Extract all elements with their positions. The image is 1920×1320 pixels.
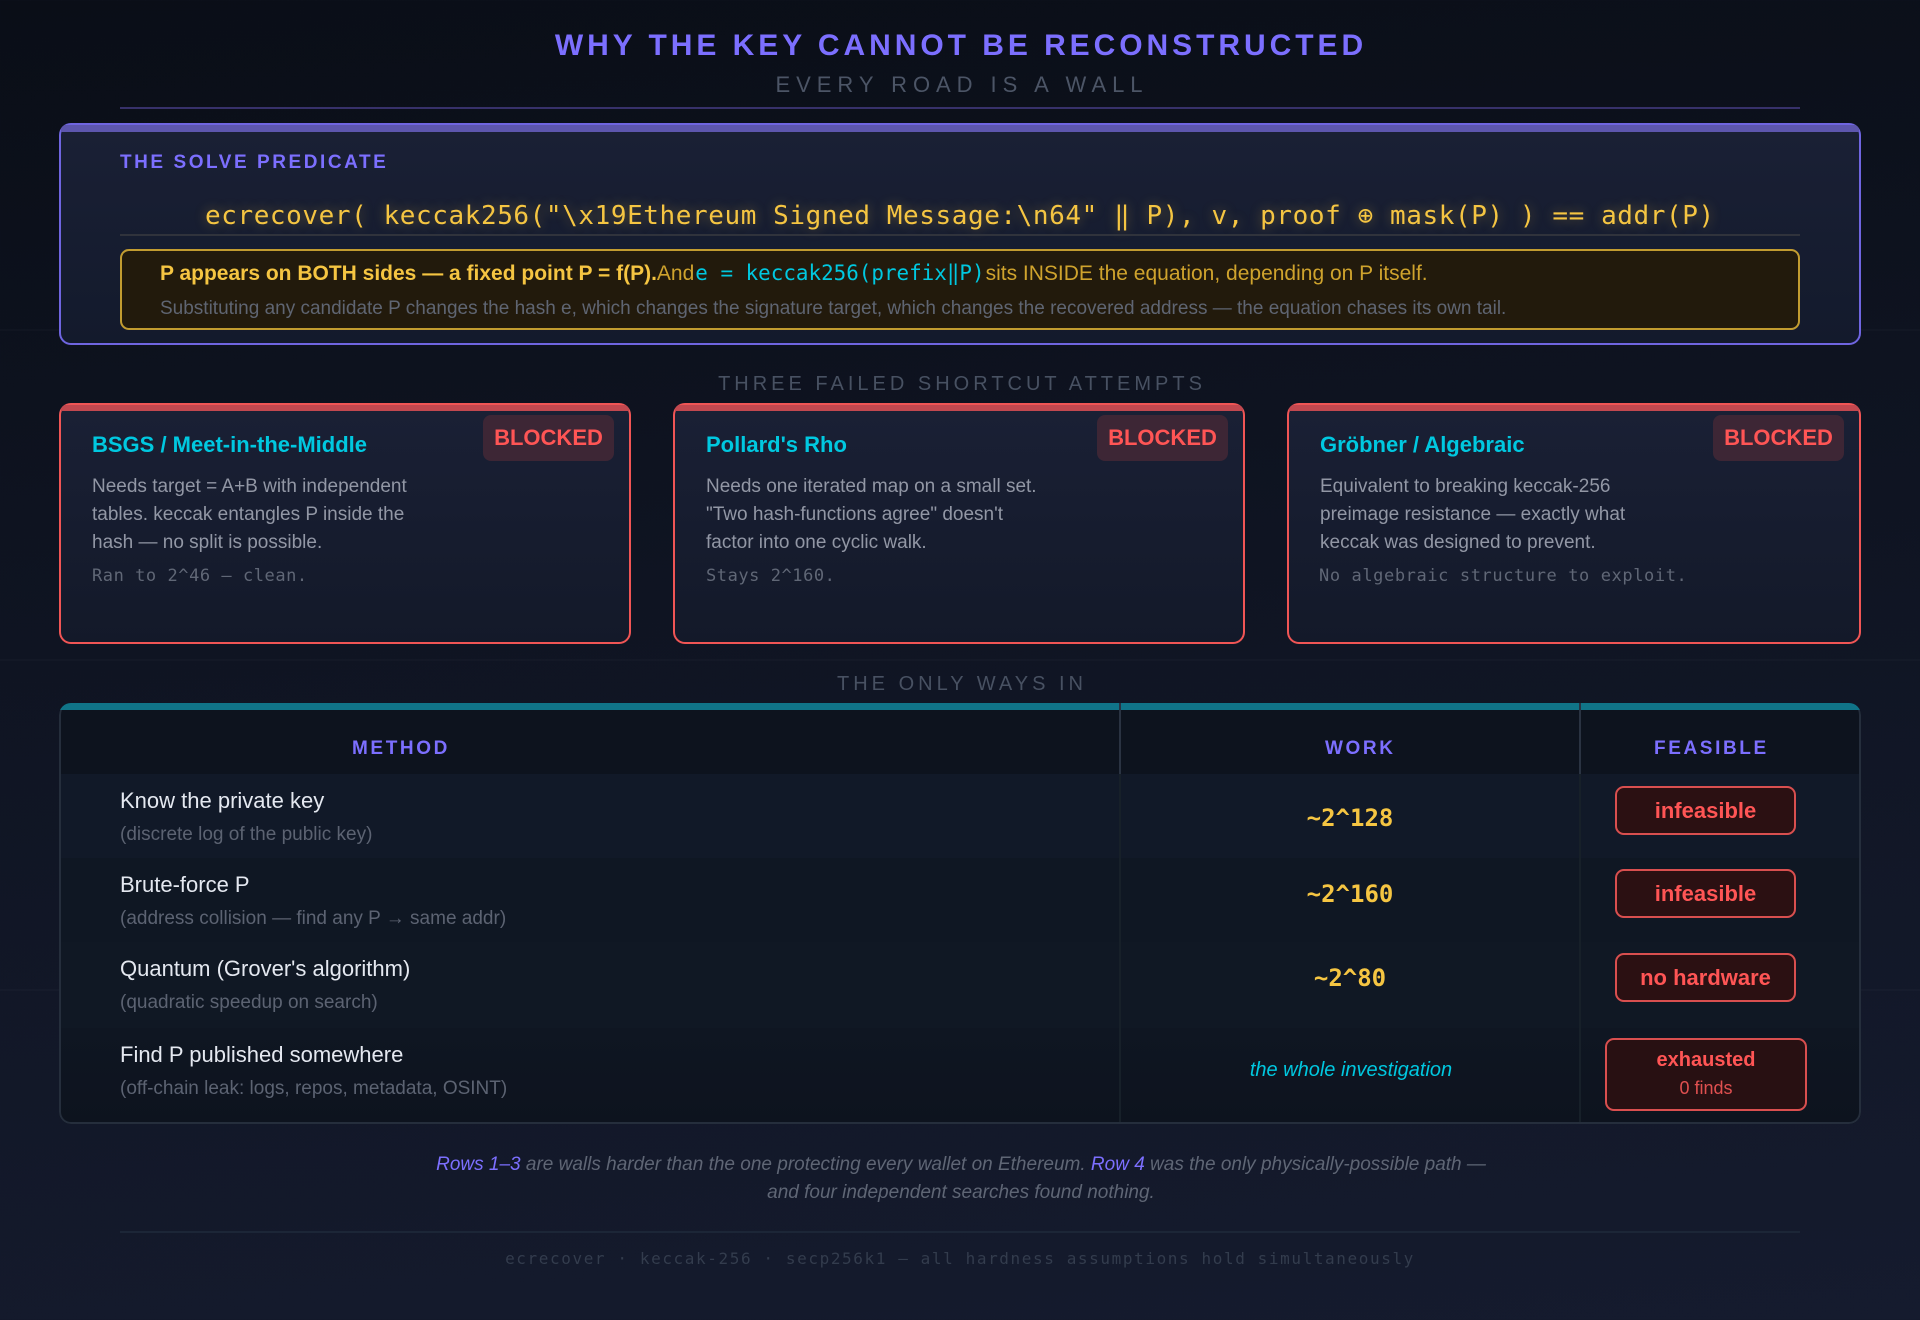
- card: Groebner: [1287, 403, 1861, 644]
- badge: blocked: BLOCKED: [1108, 425, 1217, 450]
- card title: Pollard's Rho: [706, 432, 847, 457]
- row 4 method: Find P published somewhere: [120, 1042, 403, 1067]
- section heading: failed attempts: THREE FAILED SHORTCUT ATTEMPTS: [718, 373, 1206, 395]
- row 2 method: Brute-force P: [120, 872, 250, 897]
- card body: [1320, 476, 1625, 553]
- caption: and four independent searches found nothing.: [767, 1182, 1155, 1203]
- card title: BSGS / Meet-in-the-Middle: [92, 432, 367, 457]
- footer: ecrecover · keccak-256 · secp256k1 — all hardness assumptions hold simultaneously: [505, 1249, 1415, 1268]
- card body: hash — no split is possible.: [92, 532, 322, 553]
- card title: Gröbner / Algebraic: [1320, 432, 1525, 457]
- card: BSGS: [59, 403, 631, 644]
- callout: fixed point: [120, 249, 1800, 330]
- card body: factor into one cyclic walk.: [706, 532, 927, 553]
- card body: "Two hash-functions agree" doesn't: [706, 504, 1003, 525]
- card body: Needs one iterated map on a small set.: [706, 476, 1037, 497]
- card body: preimage resistance — exactly what: [1320, 504, 1625, 525]
- status main: exhausted: [1657, 1048, 1755, 1070]
- card note: Ran to 2^46 — clean.: [92, 566, 308, 586]
- section heading: only ways in: THE ONLY WAYS IN: [837, 673, 1087, 695]
- card note: No algebraic structure to exploit.: [1319, 566, 1687, 586]
- badge: blocked: BLOCKED: [494, 425, 603, 450]
- row 4 status: [1605, 1038, 1807, 1111]
- panel: the solve predicate: [59, 123, 1861, 345]
- row 1 status: [1615, 786, 1796, 834]
- row 4 work: the whole investigation: [1250, 1059, 1452, 1081]
- row 2 work: ~2^160: [1307, 880, 1393, 908]
- column header: feasible: FEASIBLE: [1654, 738, 1769, 759]
- badge: blocked: [1097, 415, 1228, 461]
- card body: keccak was designed to prevent.: [1320, 532, 1596, 553]
- card body: Equivalent to breaking keccak-256: [1320, 476, 1610, 497]
- card body: [92, 476, 407, 553]
- column header: method: METHOD: [352, 738, 450, 759]
- card body: Needs target = A+B with independent: [92, 476, 407, 497]
- card: Pollard's Rho: [673, 403, 1245, 644]
- row 1 work: ~2^128: [1307, 804, 1393, 832]
- row 1 note: (discrete log of the public key): [120, 824, 372, 845]
- row 1 status: infeasible: [1655, 798, 1756, 822]
- caption: Rows 1–3 are walls harder than the one protecting every wallet on Ethereum. Row 4 was the only physically-possible path —: [436, 1154, 1486, 1175]
- column header: work: WORK: [1325, 738, 1396, 759]
- badge: blocked: BLOCKED: [1724, 425, 1833, 450]
- subtitle: EVERY ROAD IS A WALL: [776, 72, 1148, 97]
- row 4 note: (off-chain leak: logs, repos, metadata, OSINT): [120, 1078, 507, 1099]
- card body: [706, 476, 1037, 553]
- card body: tables. keccak entangles P inside the: [92, 504, 404, 525]
- panel heading: THE SOLVE PREDICATE: [120, 152, 388, 173]
- row 3 work: ~2^80: [1314, 964, 1386, 992]
- caption: [436, 1154, 1486, 1203]
- row 3 note: (quadratic speedup on search): [120, 992, 378, 1013]
- callout detail line: Substituting any candidate P changes the hash e, which changes the signature target, which changes the recovered address — the equation chases its own tail.: [160, 298, 1506, 319]
- badge: blocked: [483, 415, 614, 461]
- title: WHY THE KEY CANNOT BE RECONSTRUCTED: [555, 29, 1367, 62]
- row 3 status: [1615, 953, 1796, 1002]
- row 2 note: (address collision — find any P → same addr): [120, 908, 506, 929]
- row 3 method: Quantum (Grover's algorithm): [120, 956, 410, 981]
- badge: blocked: [1713, 415, 1844, 461]
- formula: ecrecover( keccak256("\x19Ethereum Signed Message:\n64" ‖ P), v, proof ⊕ mask(P) ) == addr(P): [205, 200, 1715, 230]
- card note: Stays 2^160.: [706, 566, 835, 586]
- row 2 status: infeasible: [1655, 881, 1756, 906]
- table: the only ways in: [59, 703, 1861, 1124]
- row 3 status: no hardware: [1640, 965, 1771, 990]
- status sub: 0 finds: [1679, 1078, 1733, 1098]
- callout main line: P appears on BOTH sides — a fixed point P = f(P).Ande = keccak256(prefix‖P)sits INSIDE the equation, depending on P itself.: [160, 261, 1428, 285]
- row 1 method: Know the private key: [120, 788, 324, 813]
- row 2 status: [1615, 869, 1796, 918]
